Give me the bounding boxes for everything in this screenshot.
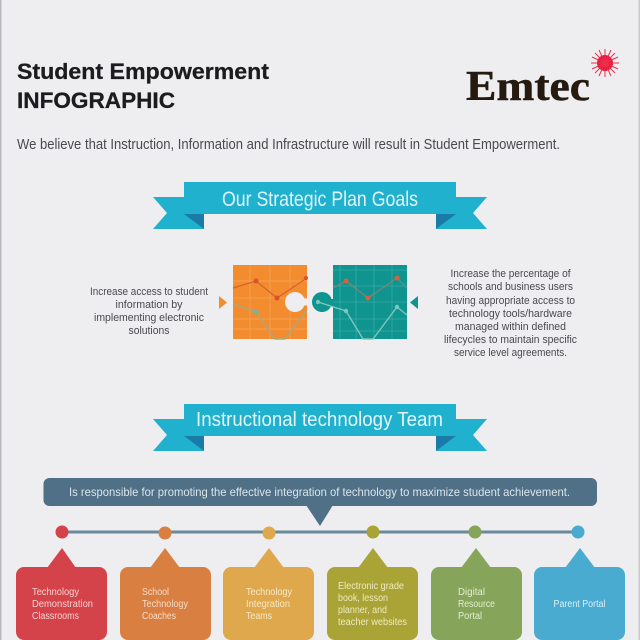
text: left goal: Increase access to student [90, 286, 208, 298]
card: School Technology Coaches: School [142, 587, 169, 598]
card: Electronic grade book: planner, and [338, 605, 387, 616]
card: Technology Demonstration Classrooms: Classrooms [32, 611, 79, 622]
text: left goal [90, 286, 208, 337]
card: Electronic grade book [327, 548, 418, 640]
text: right goal: lifecycles to maintain specific [444, 334, 578, 346]
puzzle piece: orange [233, 265, 308, 339]
timeline [56, 526, 584, 540]
text: left goal: solutions [128, 325, 170, 337]
card: School Technology Coaches: Technology [142, 599, 188, 610]
card: Technology Integration Teams: Integration [246, 599, 290, 610]
title: Student Empowerment [17, 59, 270, 84]
arrow: teal [410, 296, 418, 309]
title: INFOGRAPHIC [17, 88, 175, 113]
logo: Emtec [466, 49, 619, 110]
banner: Instructional technology Team [153, 404, 487, 451]
title [17, 59, 270, 113]
arrow: orange [219, 296, 227, 309]
text: right goal: technology tools/hardware [449, 308, 572, 320]
card: Technology Integration Teams: Technology [246, 587, 292, 598]
banner: Instructional technology Team: Instructional technology Team [196, 408, 443, 431]
intro text: We believe that Instruction, Information and Infrastructure will result in Student Empowerment. [17, 137, 560, 153]
text: right goal: Increase the percentage of [450, 268, 571, 280]
card: Technology Demonstration Classrooms [16, 548, 107, 640]
icon: red starburst [591, 49, 619, 77]
logo: Emtec: Emtec [466, 64, 590, 110]
text: right goal: having appropriate access to [446, 295, 575, 307]
card: Parent Portal: Parent Portal [554, 599, 606, 610]
text: right goal [444, 268, 578, 359]
banner: Our Strategic Plan Goals [153, 182, 487, 229]
callout: responsibility statement [44, 478, 597, 526]
card: Electronic grade book: Electronic grade [338, 581, 404, 592]
card: Technology Demonstration Classrooms: Demonstration [32, 599, 93, 610]
text: right goal: managed within defined [455, 321, 566, 333]
card: Electronic grade book: teacher websites [338, 617, 407, 628]
card: School Technology Coaches [120, 548, 211, 640]
card: Electronic grade book: book, lesson [338, 593, 388, 604]
card: Technology Integration Teams: Teams [246, 611, 272, 622]
text: right goal: service level agreements. [454, 347, 567, 359]
card: Technology Integration Teams [223, 548, 314, 640]
banner: Our Strategic Plan Goals: Our Strategic Plan Goals [222, 188, 418, 211]
text: left goal: information by [116, 299, 183, 311]
text: right goal: schools and business users [448, 281, 574, 293]
card: Technology Demonstration Classrooms: Technology [32, 587, 79, 598]
card: Digital Resource Portal: Resource [458, 599, 495, 610]
card: School Technology Coaches: Coaches [142, 611, 176, 622]
callout: responsibility statement: Is responsible for promoting the effective integration of technology to maximize student achievement. [69, 485, 570, 499]
card: Digital Resource Portal: Digital [458, 587, 485, 598]
card: Parent Portal [534, 548, 625, 640]
text: left goal: implementing electronic [94, 312, 205, 324]
puzzle piece: teal [312, 265, 407, 339]
card: Digital Resource Portal: Portal [458, 611, 482, 622]
card: Digital Resource Portal [431, 548, 522, 640]
